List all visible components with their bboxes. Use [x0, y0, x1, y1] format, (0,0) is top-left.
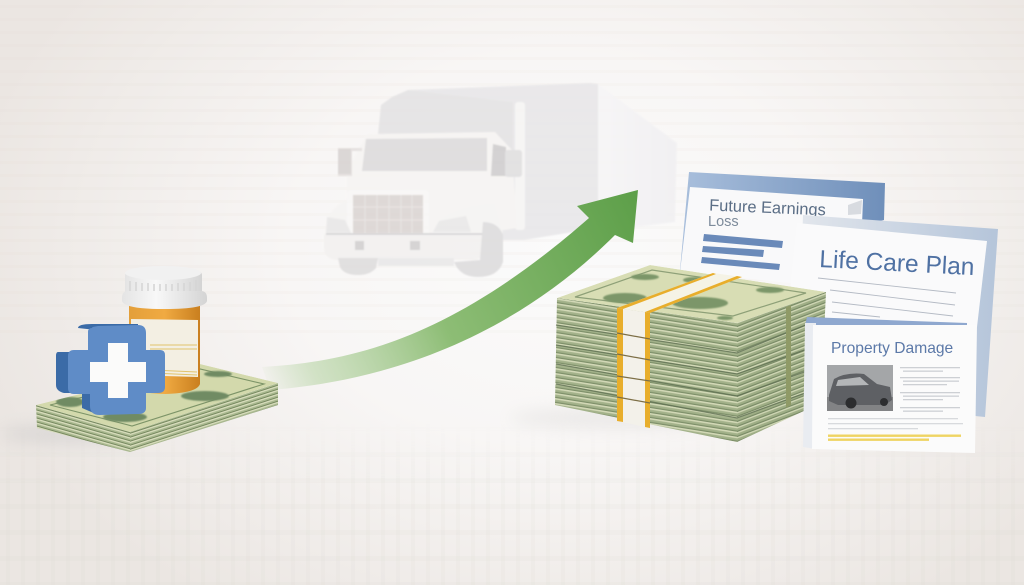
white sheet: [680, 187, 863, 285]
heading: [708, 197, 826, 230]
shaded backing: [803, 323, 816, 449]
bottle label: [131, 319, 198, 377]
white sheet: [790, 223, 987, 327]
left face: [555, 298, 737, 442]
body lines: [828, 418, 963, 429]
cross front: [68, 325, 165, 415]
white sheet: [812, 325, 977, 453]
ground shadow: [0, 425, 140, 443]
cross side: [56, 324, 138, 414]
fender: [325, 200, 503, 233]
blue top strip: [805, 317, 967, 327]
bumper: [324, 234, 483, 260]
heading: Loss: [708, 214, 739, 230]
left face: [36, 405, 130, 452]
front-right wheel: [454, 222, 503, 277]
heading: Future Earnings: [709, 197, 826, 219]
left money stack: [0, 364, 278, 452]
windshield: [362, 138, 487, 171]
bottle cap: [122, 266, 207, 309]
car photo: [827, 365, 893, 411]
paper band: [617, 273, 791, 428]
yellow highlighted note: [828, 434, 961, 441]
grey corner fold: [848, 200, 862, 215]
trailer side: [598, 84, 677, 232]
faded truck illustration: [324, 83, 677, 277]
headlights: [326, 216, 471, 233]
ruled lines: [818, 278, 956, 317]
bundle gaps: [556, 325, 813, 418]
exhaust stack: [515, 102, 525, 230]
top note: [557, 265, 826, 323]
ground shadow: [510, 408, 730, 428]
document: life care plan: [790, 215, 998, 417]
blue medical cross: [56, 324, 165, 415]
pill bottle: [122, 266, 207, 394]
roof fairing: [378, 90, 513, 150]
left mirror: [338, 148, 362, 176]
white plus: [90, 343, 146, 398]
bullet lines: [900, 367, 960, 412]
bottle body: [129, 305, 200, 394]
front-left wheel: [338, 258, 378, 275]
right face: [130, 383, 278, 452]
heading: Property Damage: [831, 340, 953, 357]
right money stack: [510, 265, 826, 442]
blue backing sheet: [680, 172, 885, 270]
growth arrow: [262, 190, 638, 390]
cab: [347, 132, 517, 240]
chassis: [378, 258, 454, 266]
right mirror: [505, 150, 522, 177]
top note: [36, 364, 278, 432]
trailer front: [407, 83, 598, 240]
document: future earnings loss: [680, 172, 885, 285]
document: property damage: [803, 317, 977, 453]
grey-blue backing sheet: [800, 215, 998, 417]
bars: [701, 234, 783, 270]
right face: [737, 292, 826, 442]
heading: Life Care Plan: [819, 246, 975, 281]
side window: [491, 144, 506, 176]
grille: [347, 190, 429, 238]
